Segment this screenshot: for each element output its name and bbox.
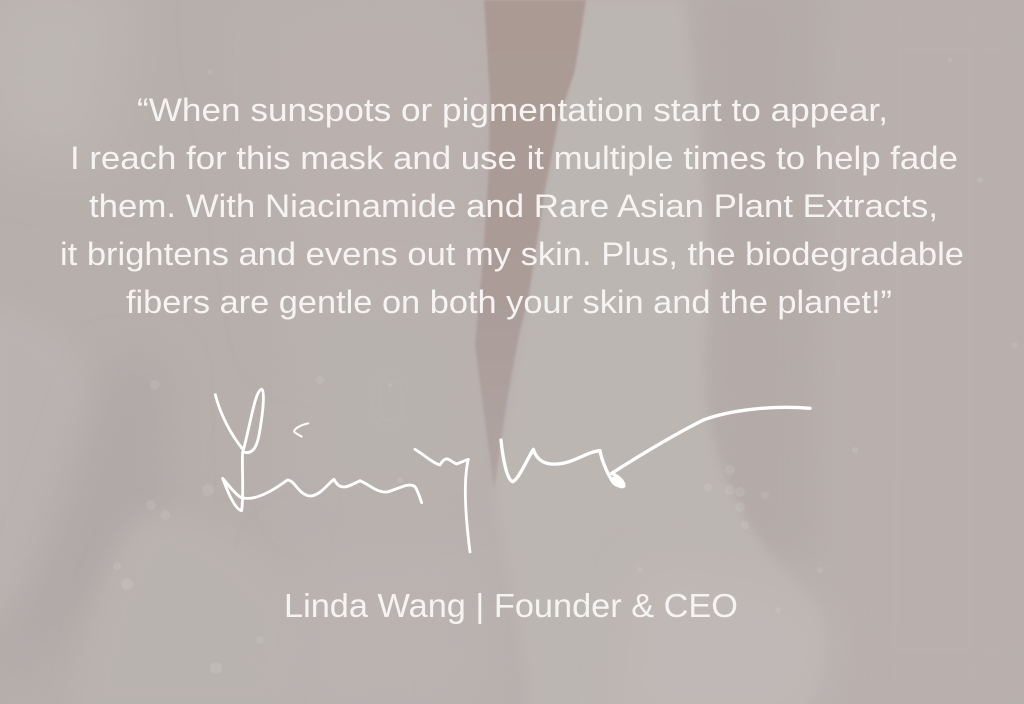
quote text: them. With Niacinamide and Rare Asian Plant Extracts, bbox=[89, 188, 938, 224]
quote text: I reach for this mask and use it multiple times to help fade bbox=[70, 140, 958, 176]
name and title: Linda Wang | Founder & CEO bbox=[284, 587, 738, 624]
background speckles bbox=[113, 58, 1018, 674]
quote text: “When sunspots or pigmentation start to appear, bbox=[137, 92, 888, 128]
quote text bbox=[60, 92, 964, 320]
quote text: it brightens and evens out my skin. Plus, the biodegradable bbox=[60, 236, 964, 272]
signature bbox=[215, 389, 810, 552]
quote text: fibers are gentle on both your skin and the planet!” bbox=[126, 284, 892, 320]
